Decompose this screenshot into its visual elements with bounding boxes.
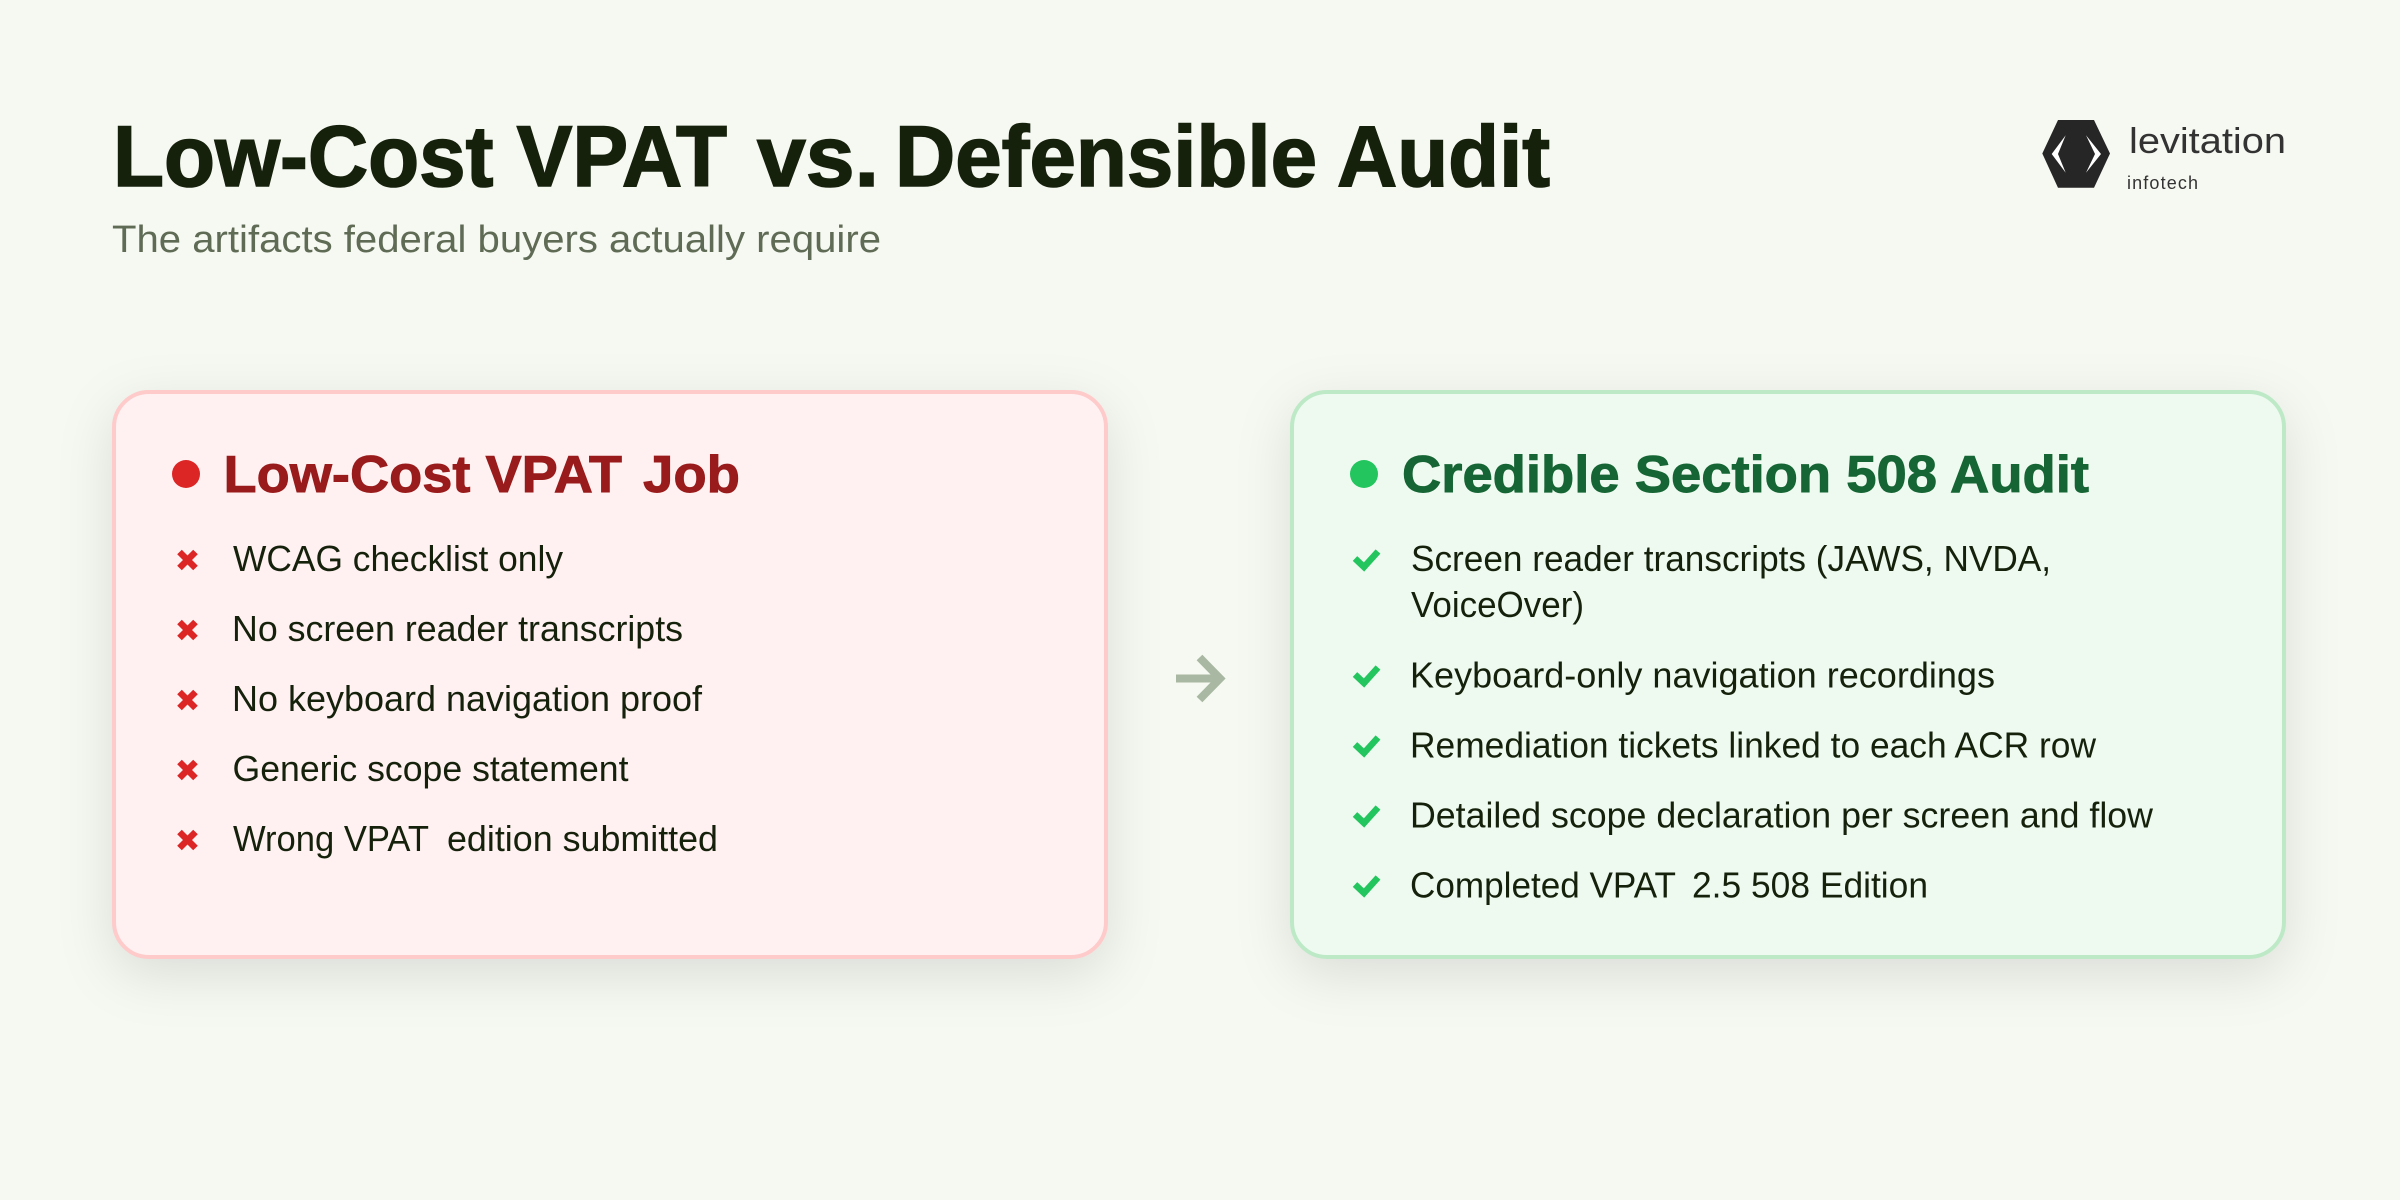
list item: Generic scope statement: [232, 748, 628, 789]
icon: hexagon logo mark: [2042, 120, 2110, 188]
list item: Detailed scope declaration per screen and flow: [1410, 794, 2154, 836]
logo: levitation infotech: [2042, 120, 2286, 193]
list item: Keyboard-only navigation recordings: [1410, 654, 1995, 696]
panel heading: Low-Cost VPAT: [224, 446, 622, 504]
list item: Completed VPAT: [1410, 864, 1676, 906]
panel background: [1292, 392, 2284, 957]
panel: credible section 508 audit: [1292, 392, 2284, 957]
list item: edition submitted: [447, 818, 718, 859]
list item: Wrong VPAT: [233, 818, 429, 859]
list item: [180, 818, 718, 859]
logo wordmark: levitation: [2129, 120, 2286, 161]
title: vs.: [757, 109, 879, 205]
list item: Screen reader transcripts (JAWS, NVDA,: [1411, 538, 2051, 579]
title: [113, 109, 1550, 205]
arrow: [1176, 658, 1221, 700]
panel heading: Job: [643, 446, 740, 504]
heading marker dot: [1350, 460, 1378, 488]
panel heading: Credible Section 508 Audit: [1402, 446, 2089, 504]
panel: low-cost VPAT job: [114, 392, 1106, 957]
logo sub-wordmark: infotech: [2127, 173, 2198, 193]
panel background: [114, 392, 1106, 957]
list item: Remediation tickets linked to each ACR row: [1410, 724, 2097, 766]
list item: [1355, 538, 2051, 625]
title: Audit: [1337, 109, 1550, 205]
list item: WCAG checklist only: [233, 538, 563, 579]
title: Defensible: [895, 109, 1317, 205]
list item: VoiceOver): [1411, 584, 1584, 625]
heading marker dot: [172, 460, 200, 488]
list item: [1355, 864, 1928, 906]
title: Low-Cost VPAT: [113, 109, 727, 205]
list item: No keyboard navigation proof: [232, 678, 703, 719]
list item: 2.5 508 Edition: [1692, 864, 1928, 906]
list item: No screen reader transcripts: [232, 608, 683, 649]
subtitle: The artifacts federal buyers actually require: [112, 219, 881, 261]
